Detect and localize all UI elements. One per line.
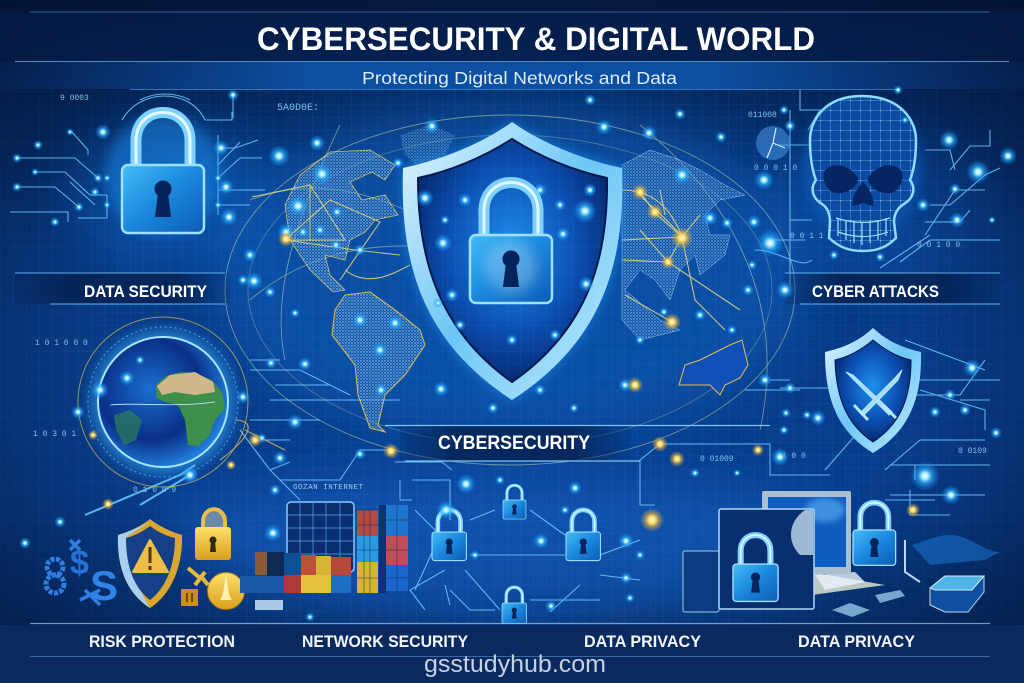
- map graticule: [225, 115, 795, 465]
- device lock two: [853, 503, 896, 565]
- small tablet: [683, 551, 719, 612]
- crossed swords: [846, 370, 902, 420]
- bottom label band: [0, 624, 1024, 683]
- small data readouts: 011008: [748, 111, 777, 120]
- panel: data privacy network locks: [432, 485, 600, 623]
- gold network links: [252, 185, 740, 330]
- server grid: [287, 502, 354, 572]
- device lock one: [733, 535, 778, 601]
- watermark: gsstudyhub.com: [424, 651, 606, 678]
- warning shield: [118, 519, 182, 608]
- small data readouts: 0 01009: [700, 455, 734, 464]
- small data readouts: 0 0109: [958, 447, 987, 456]
- skull eyes and nose: [823, 165, 903, 206]
- continent: north america: [285, 150, 398, 292]
- wave: [912, 535, 1000, 565]
- label: risk protection: RISK PROTECTION: [89, 633, 235, 651]
- small data readouts: 0 0 0 1 0: [754, 164, 797, 173]
- small data readouts: 0 1 0 0 9: [133, 486, 176, 495]
- label: data privacy: DATA PRIVACY: [584, 633, 701, 651]
- label: cybersecurity: CYBERSECURITY: [438, 433, 590, 454]
- small data readouts: 1 0 3 0 1: [33, 430, 76, 439]
- radar dial: [756, 126, 790, 160]
- laptop: [745, 565, 885, 598]
- container stacks: [240, 505, 408, 610]
- panel: data security lock: [105, 112, 221, 235]
- gold nodes: [88, 184, 920, 532]
- label: data security: [15, 273, 230, 304]
- large tablet: [719, 509, 814, 609]
- header band: [0, 12, 1024, 90]
- continent: greenland: [400, 125, 455, 168]
- central shield: [403, 122, 622, 400]
- label: cybersecurity: [385, 425, 770, 461]
- small data readouts: GOZAN INTERNET: [293, 484, 363, 492]
- small data readouts: 0 0 1 0 0: [917, 241, 960, 250]
- panel: devices art: [683, 491, 1000, 617]
- panel: risk protection art: [46, 509, 244, 610]
- continent: south land: [114, 410, 142, 445]
- shield padlock: [470, 182, 552, 303]
- small data readouts: 9 0003: [60, 94, 89, 103]
- panel: risk protection art: S: [90, 562, 118, 609]
- subtitle: Protecting Digital Networks and Data: [362, 68, 677, 88]
- gears and dollar signs: [46, 540, 100, 605]
- continent: south america: [332, 292, 425, 432]
- small data readouts: 1 0 1 0 0 0: [35, 339, 88, 348]
- panel: network security art: [240, 502, 408, 610]
- skull teeth: [836, 218, 890, 245]
- panel: risk protection art: $: [70, 544, 89, 582]
- label bands: [15, 273, 1000, 461]
- small data readouts: 01 0 0: [777, 452, 806, 461]
- gold coin: [208, 572, 244, 610]
- continent: africa: [156, 372, 225, 446]
- continent: eurasia: [622, 150, 745, 340]
- label: cyber attacks: [785, 273, 1000, 304]
- small data readouts: [33, 94, 987, 495]
- small data readouts: 5A0D0E:: [277, 103, 319, 114]
- continent: australia: [679, 340, 748, 395]
- panel: cyber skull: [756, 96, 922, 251]
- glow nodes: [12, 85, 1017, 622]
- panel: globe: [71, 317, 248, 487]
- small data readouts: 0 0 1 1 0 1: [790, 232, 843, 241]
- shield dots: [416, 183, 597, 346]
- panel: defense shield: [825, 328, 921, 453]
- world map: [225, 115, 795, 465]
- circuit traces: [10, 90, 1000, 612]
- storage box: [930, 576, 984, 612]
- gold padlock: [195, 509, 231, 560]
- label: network security: NETWORK SECURITY: [302, 633, 468, 651]
- label: data privacy two: DATA PRIVACY: [798, 633, 915, 651]
- label: cyber attacks: CYBER ATTACKS: [812, 283, 939, 301]
- label: data security: DATA SECURITY: [84, 283, 207, 301]
- title: CYBERSECURITY & DIGITAL WORLD: [257, 21, 815, 57]
